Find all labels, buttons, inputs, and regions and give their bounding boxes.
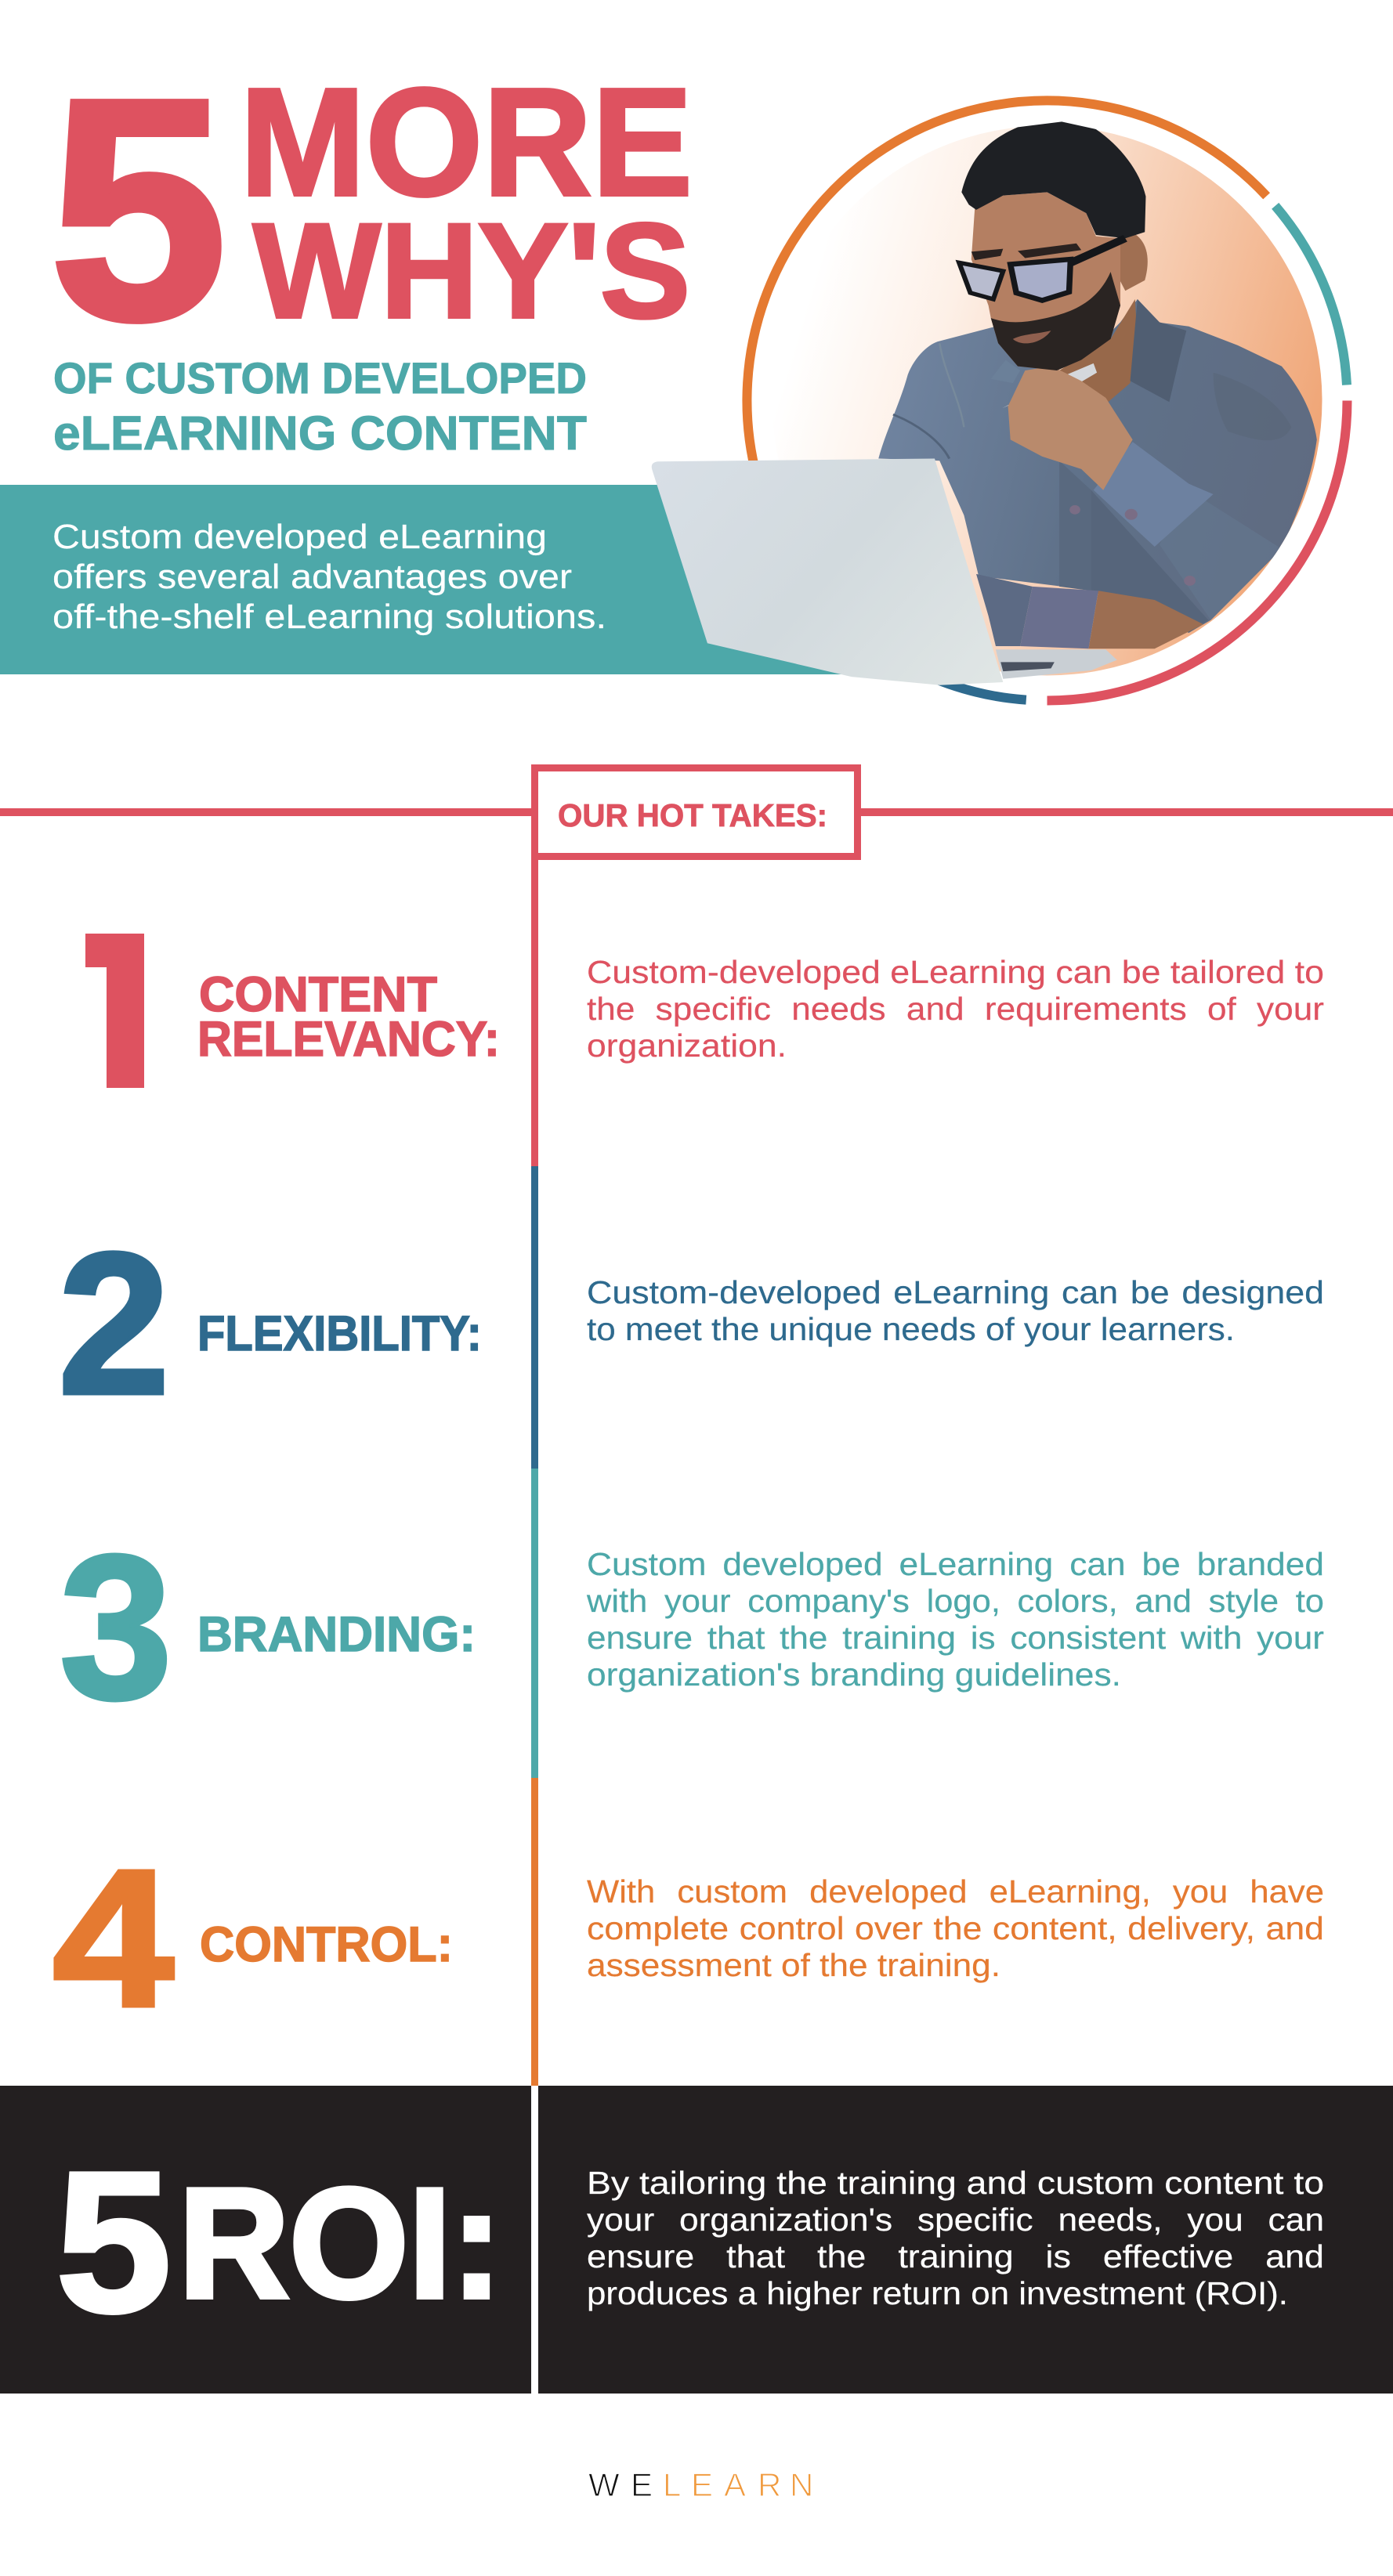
ring arc teal (1275, 206, 1347, 385)
title word MORE: MORE (240, 56, 693, 228)
heading flexibility: FLEXIBILITY: (197, 1306, 482, 1361)
heading content relevancy: RELEVANCY: (197, 1012, 500, 1067)
description 5: produces a higher return on investment (ROI). (587, 2275, 1288, 2311)
footer logo (588, 2466, 813, 2503)
description 3: ensure that the training is consistent with your (587, 1620, 1324, 1656)
row 4: control (52, 1829, 1324, 2047)
subtitle line 2: eLEARNING CONTENT (53, 406, 587, 460)
row 2: flexibility (58, 1210, 1324, 1436)
heading content relevancy: CONTENT (199, 967, 437, 1022)
man body clipped to disc (878, 299, 1317, 649)
segmented ring (747, 100, 1348, 700)
intro paragraph: offers several advantages over (52, 558, 572, 596)
section divider line (0, 808, 1393, 816)
row 1: content relevancy (56, 902, 1324, 1132)
description 2: Custom-developed eLearning can be designed (587, 1274, 1324, 1310)
description 2 (587, 1274, 1324, 1347)
heading ROI: ROI: (179, 2156, 502, 2331)
subtitle (53, 353, 587, 460)
hot takes label box (534, 768, 857, 857)
description 4: assessment of the training. (587, 1947, 1000, 1983)
hot takes text: OUR HOT TAKES: (558, 797, 827, 833)
big number 5: 5 (49, 34, 227, 385)
teal intro band (0, 485, 854, 674)
description 3: Custom developed eLearning can be branded (587, 1546, 1324, 1582)
subtitle line 1: OF CUSTOM DEVELOPED (53, 353, 587, 403)
number 2: 2 (58, 1210, 170, 1436)
description 5 (587, 2165, 1324, 2311)
laptop (652, 459, 1117, 685)
intro paragraph (52, 518, 606, 636)
description 1: the specific needs and requirements of your (587, 991, 1324, 1027)
description 4: With custom developed eLearning, you have (587, 1873, 1324, 1909)
logo WE: WE (588, 2466, 653, 2503)
ring arc red (1047, 401, 1348, 700)
header title (49, 34, 693, 385)
number 1: 1 (56, 902, 174, 1132)
number 5: 5 (56, 2130, 172, 2354)
heading control: CONTROL: (200, 1917, 453, 1972)
number 3: 3 (60, 1512, 172, 1742)
description 1: organization. (587, 1028, 787, 1064)
dark band left (0, 2086, 531, 2394)
man head (959, 121, 1148, 370)
heading content relevancy (197, 967, 500, 1067)
row 3: branding (60, 1512, 1324, 1742)
description 5: your organization's specific needs, you can (587, 2202, 1324, 2238)
number 4: 4 (52, 1829, 174, 2047)
title word WHY'S: WHY'S (253, 196, 690, 346)
photo disc background (772, 125, 1322, 675)
intro paragraph: off-the-shelf eLearning solutions. (52, 598, 606, 636)
description 1: Custom-developed eLearning can be tailored to (587, 954, 1324, 990)
ring arc blue (921, 673, 1026, 700)
description 5: By tailoring the training and custom content to (587, 2165, 1324, 2201)
description 5: ensure that the training is effective and (587, 2238, 1324, 2274)
dark band right (538, 2086, 1393, 2394)
description 3 (586, 1546, 1324, 1693)
description 4 (587, 1873, 1324, 1983)
description 1 (587, 954, 1324, 1064)
description 3: with your company's logo, colors, and style to (586, 1583, 1324, 1619)
intro paragraph: Custom developed eLearning (52, 518, 547, 556)
row 5: ROI dark band (0, 2086, 1393, 2394)
description 2: to meet the unique needs of your learners. (587, 1311, 1235, 1347)
illustration: man at laptop (652, 121, 1317, 685)
heading branding: BRANDING: (197, 1607, 476, 1662)
ring arc orange (747, 100, 1267, 479)
logo LEARN: LEARN (663, 2466, 813, 2503)
timeline spine (531, 860, 538, 2086)
description 3: organization's branding guidelines. (587, 1657, 1121, 1693)
description 4: complete control over the content, delivery, and (587, 1910, 1324, 1946)
